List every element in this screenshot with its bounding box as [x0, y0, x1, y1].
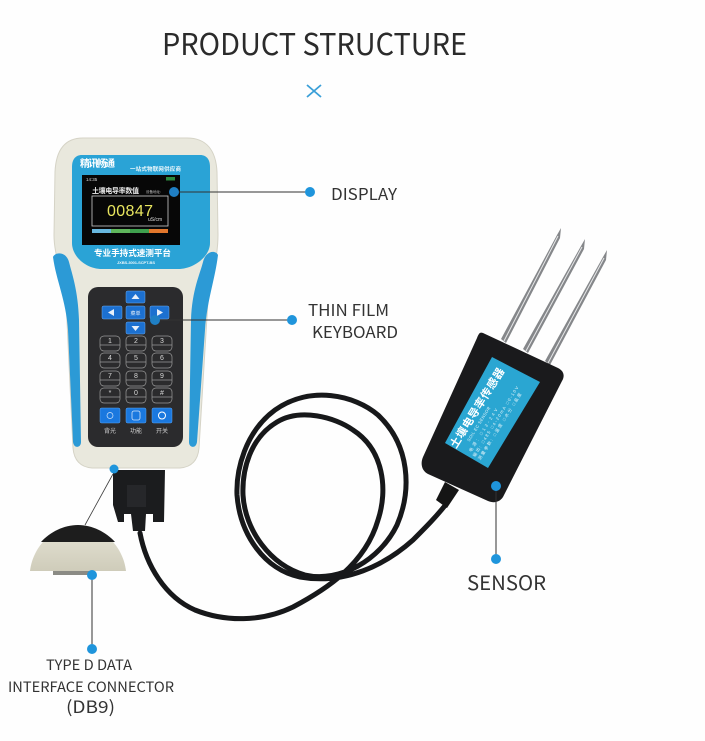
blue faceplate — [72, 155, 210, 269]
number keys — [100, 336, 172, 403]
sensor label: 土壤电导率传感器 — [447, 365, 507, 451]
thin film keypad: 4 — [108, 355, 112, 362]
display screen: 设备地址: — [146, 189, 161, 194]
display screen: 14:35 — [86, 177, 98, 182]
thin film keypad: 菜单 — [130, 310, 141, 317]
thin film keypad: # — [160, 390, 164, 397]
thin film keypad: 5 — [134, 355, 138, 362]
connector leader — [85, 464, 118, 654]
probes — [501, 228, 607, 365]
display screen: uS/cm — [148, 217, 162, 223]
keyboard label: KEYBOARD — [312, 319, 398, 343]
handheld device — [53, 138, 218, 468]
strain relief — [436, 482, 459, 508]
display screen — [82, 175, 180, 245]
sensor leader — [491, 481, 501, 564]
connector label: (DB9) — [66, 693, 115, 718]
connector label: INTERFACE CONNECTOR — [8, 677, 174, 697]
logo: 精讯畅通 — [80, 157, 115, 170]
sensor housing — [422, 333, 564, 502]
thin film keypad: 7 — [108, 373, 112, 380]
thin film keypad: 9 — [160, 373, 164, 380]
function buttons — [100, 408, 172, 423]
display screen: 00847 — [107, 203, 153, 220]
thin film keypad: 6 — [160, 355, 164, 362]
sensor label: 输出: □485 □4-20mA □0-10V — [471, 385, 520, 458]
cable — [140, 395, 447, 619]
button captions: 开关 — [156, 427, 168, 435]
sensor label — [445, 357, 540, 468]
keyboard label — [308, 297, 398, 343]
thin film keypad — [88, 287, 183, 447]
DB9 connector — [113, 470, 165, 531]
button captions: 背光 — [104, 427, 116, 435]
thin film keypad: 8 — [134, 373, 138, 380]
sensor label: 测量参数: □温度 □水分 □盐度 — [476, 391, 524, 461]
thin film keypad: 2 — [134, 338, 138, 345]
display screen: 土壤电导率数值 — [92, 186, 139, 195]
device body — [54, 138, 218, 468]
icon: blue cross — [307, 85, 321, 97]
connector label — [8, 655, 174, 718]
slogan: 一站式物联网供应商 — [130, 165, 181, 173]
display leader — [169, 187, 315, 197]
handheld device: JXBS-3001-SCPT-BS — [117, 260, 155, 265]
keyboard leader — [150, 315, 297, 325]
sensor label text: SENSOR — [467, 567, 546, 596]
button captions: 功能 — [130, 427, 142, 435]
thin film keypad: 3 — [160, 338, 164, 345]
model text: 专业手持式速测平台 — [94, 247, 171, 258]
DB9 port detail dome — [30, 525, 126, 575]
keyboard label: THIN FILM — [308, 297, 389, 321]
thin film keypad: 1 — [108, 338, 112, 345]
sensor label: SOIL EC SENSOR — [466, 406, 491, 442]
button captions — [104, 427, 168, 435]
connector label: TYPE D DATA — [46, 655, 133, 675]
blue grips — [53, 253, 81, 447]
thin film keypad: * — [109, 390, 112, 397]
soil sensor — [422, 228, 607, 508]
title: PRODUCT STRUCTURE — [162, 20, 467, 64]
sensor label: 电源: □12-24V — [467, 407, 499, 453]
navigation keys — [102, 291, 169, 334]
thin film keypad: 0 — [134, 390, 138, 397]
display label: DISPLAY — [331, 181, 398, 205]
